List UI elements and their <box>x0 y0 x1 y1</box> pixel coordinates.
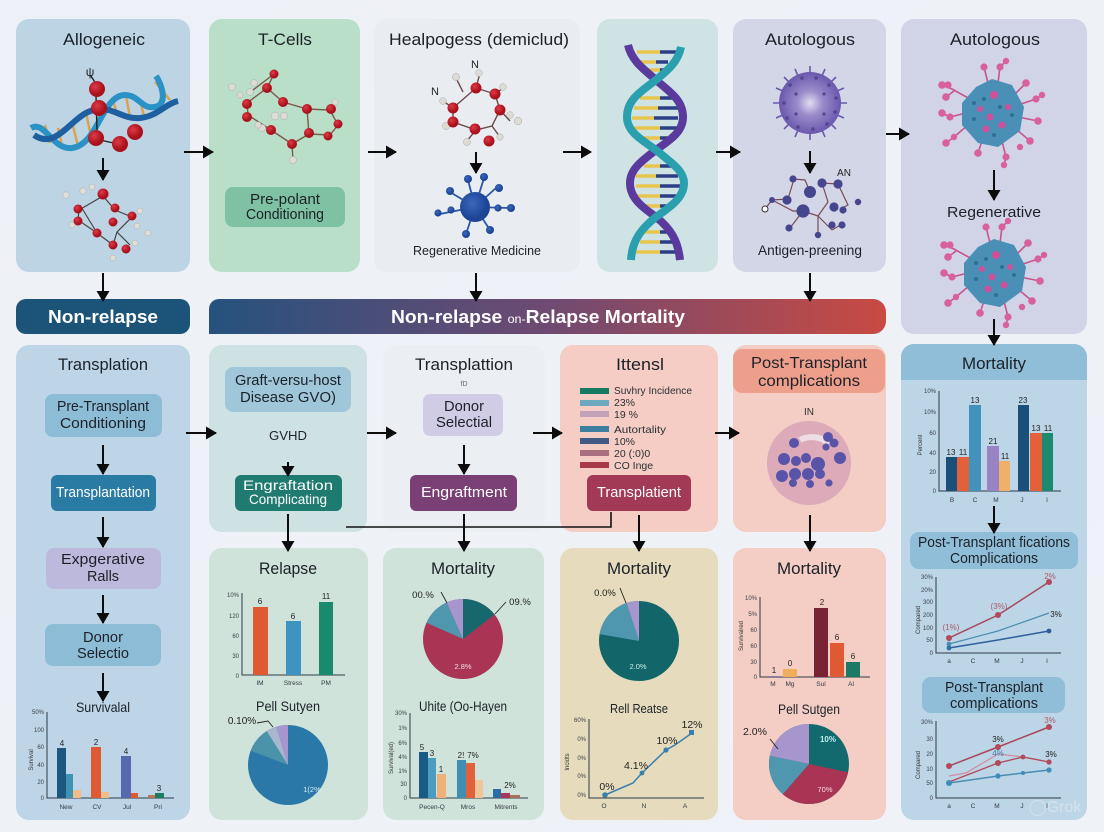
line chart: complications: M <box>994 658 1000 665</box>
bar chart: survival: 4 <box>124 747 129 756</box>
heading: Healpogess (demiclud): Healpogess (demiclud) <box>389 30 569 49</box>
box: Transplantation: Transplantation <box>56 485 150 501</box>
pie chart: Pell Sutgen <box>743 724 849 804</box>
bar chart: mortality: Mg <box>785 681 795 688</box>
bar chart: grouped: 0 <box>404 796 408 802</box>
heading: T-Cells: T-Cells <box>258 30 312 49</box>
bar chart: grouped: 2% <box>504 781 516 790</box>
header: Post-Transplant complications <box>733 349 885 393</box>
pie chart: mortality: 09.% <box>509 597 531 608</box>
arrow: Healpogess to DNA <box>563 151 591 153</box>
bar chart: grouped: 7% <box>467 751 479 760</box>
line chart: complications lower: 3% <box>1044 716 1056 725</box>
heading: Transplanttion: Transplattion <box>415 355 513 374</box>
bar chart: relapse: 30 <box>232 654 240 660</box>
box: Donor Selectio: Donor <box>83 630 123 646</box>
line chart: complications: (1%) <box>943 623 960 632</box>
bar chart: survival: 2 <box>94 738 99 747</box>
line chart: complications lower <box>916 716 1061 810</box>
bar chart: grouped: 30 <box>400 782 408 788</box>
arrow: Healpogess to banner <box>475 273 477 301</box>
bar chart: grouped <box>389 711 528 811</box>
line chart: relapse: 0% <box>577 756 587 762</box>
line chart: complications: a <box>947 658 951 665</box>
bar chart: relapse: 10% <box>227 593 240 599</box>
arrow: Donor to Survival <box>102 673 104 701</box>
pie chart: Pell Sutgen: 70% <box>817 785 833 794</box>
line chart: complications lower: 30 <box>926 737 934 743</box>
bar chart: grouped: 5 <box>420 743 425 752</box>
bar chart: relapse: IM <box>256 680 264 687</box>
banner: Non-relapse or Relapse Mortality: Non-relapse on-Relapse Mortality <box>391 306 686 327</box>
arrow: Autologous to Autologous <box>886 133 909 135</box>
bar chart: mortality: B <box>950 497 954 504</box>
panel: Transplanttion <box>383 345 545 532</box>
bar chart: relapse: 60 <box>232 634 240 640</box>
bar chart: survival: 4 <box>60 739 65 748</box>
bar chart: relapse: 11 <box>322 592 331 601</box>
bar chart: relapse: 120 <box>229 614 240 620</box>
bar chart: mortality: 2 <box>820 598 825 607</box>
arrow: Donor to Engraftment <box>463 445 465 474</box>
bar chart: mortality: 10% <box>924 410 937 416</box>
line chart: relapse <box>565 718 704 810</box>
bar chart: survival: CV <box>92 804 102 811</box>
box: Pre-Transplant Conditioning: Pre-Transplant <box>57 399 149 415</box>
line chart: relapse: 4.1% <box>624 760 648 772</box>
bar chart: grouped: Survival(ed) <box>389 742 395 774</box>
bar chart: survival: Pri <box>154 804 162 811</box>
bar chart: mortality <box>918 389 1061 504</box>
icon: antigen network: AN <box>837 168 851 179</box>
box: Post-Transplant fications Complications: Complications <box>950 551 1038 567</box>
line chart: complications: 2% <box>1044 572 1056 581</box>
panel: T-Cells <box>209 19 360 272</box>
bar chart: relapse: PM <box>321 680 331 687</box>
line chart: complications <box>916 572 1062 665</box>
arrow: Ittensl to complications <box>715 432 739 434</box>
box: Expgerative Ralls <box>46 548 161 589</box>
arrow: complications to Mortality <box>809 515 811 551</box>
icon: spiked virus <box>773 66 847 140</box>
line chart: relapse: N <box>642 803 647 810</box>
heading: Allogeneic: Allogeneic <box>63 30 146 49</box>
legend: 10% <box>614 436 635 448</box>
legend: 19 % <box>614 409 638 421</box>
bar chart: mortality: 6 <box>835 633 840 642</box>
panel: Allogeneic <box>16 19 190 272</box>
icon: ring molecule with N labels: N <box>471 59 479 71</box>
bar chart: relapse: 6 <box>258 597 263 606</box>
line chart: complications lower: 30% <box>921 720 934 726</box>
legend: Autortality <box>614 424 667 436</box>
line chart: complications lower: M <box>994 803 1000 810</box>
bar chart: survival: 40 <box>37 763 45 769</box>
bar chart: mortality: 6 <box>851 652 856 661</box>
line chart: relapse: Incidts <box>565 753 571 771</box>
icon: blue cell <box>434 173 515 238</box>
bar chart: mortality: 0 <box>754 675 758 681</box>
panel: GVHD <box>209 345 367 532</box>
box: Post-Transplant fications Complications <box>910 532 1078 569</box>
pie chart: mortality: 2.8% <box>454 662 472 671</box>
arrow: Transplantation to GVHD <box>186 432 216 434</box>
arrow: Transplantient to Mortality <box>638 515 640 551</box>
arrow: virus to antigen <box>809 151 811 173</box>
line chart: complications lower: Compared <box>916 751 922 779</box>
bar chart: mortality: I <box>1046 497 1048 504</box>
icon: DNA with red atoms <box>31 65 178 152</box>
bar chart: relapse: 0 <box>236 674 240 680</box>
arrow: Autologous to Mortality <box>993 319 995 345</box>
bar chart: grouped: Mitrents <box>494 804 518 811</box>
label: GVHD: GVHD <box>269 429 307 443</box>
bar chart: mortality: 11 <box>1001 452 1010 461</box>
line chart: complications: 300 <box>923 600 934 606</box>
bar chart: mortality: 13 <box>947 448 956 457</box>
icon: ring molecule <box>63 184 151 261</box>
icon: DNA double helix <box>627 45 684 260</box>
arrow: Mortality chart to complications <box>993 506 995 533</box>
line chart: complications lower: 20 <box>926 752 934 758</box>
line chart: complications lower: a <box>947 803 951 810</box>
box: Pre-Transplant Conditioning <box>45 394 162 437</box>
bar chart: mortality: Survivalred <box>739 621 745 651</box>
line chart: relapse: 60% <box>574 718 587 724</box>
box: Engraftment <box>410 475 517 511</box>
label: Regenerative: Regenerative <box>947 204 1041 221</box>
line chart: relapse: 10% <box>656 735 678 747</box>
bar chart: grouped: 1% <box>398 726 408 732</box>
box: Expgerative Ralls: Ralls <box>87 569 119 585</box>
box: Donor Selectio <box>45 624 161 666</box>
bar chart: mortality: 13 <box>1032 424 1041 433</box>
line chart: complications: 0 <box>930 651 934 657</box>
legend: CO Inge <box>614 460 653 472</box>
banner: Non-relapse <box>16 299 190 334</box>
bar chart: grouped: Pecen-Q <box>419 804 445 811</box>
line chart: complications lower: 50 <box>926 781 934 787</box>
bar chart: grouped: 6% <box>398 741 408 747</box>
bar chart: grouped: 4% <box>398 755 408 761</box>
heading: Rell Reatse: Rell Reatse <box>610 701 668 716</box>
heading: Mortality: Mortality <box>777 559 841 578</box>
panel: Autologous (antigen) <box>733 19 886 272</box>
arrow: Transplantation to Expgerative <box>102 517 104 547</box>
line chart: relapse: 0% <box>577 737 587 743</box>
bar chart: survival: 60 <box>37 745 45 751</box>
heading: Transplantation: Transplation <box>58 355 148 374</box>
bar chart: mortality: 0 <box>788 659 793 668</box>
heading: Uhite (Oo-Hayen: Uhite (Oo-Hayen <box>419 698 507 714</box>
pie chart: mortality <box>594 588 679 681</box>
icon: DNA with red atoms: ψ <box>86 65 94 79</box>
connector: GVHD to Transplantient <box>346 512 611 527</box>
label: Regenerative Medicine: Regenerative Medicine <box>413 243 541 258</box>
bar chart: survival: New <box>59 804 73 811</box>
watermark: Grok: ◯Grok <box>1029 799 1082 816</box>
label: fD: fD <box>460 381 468 388</box>
box: Donor Selectial: Selectial <box>436 415 492 431</box>
legend: 23% <box>614 397 635 409</box>
box: Pre-polant Conditioning: Pre-polant <box>250 192 320 208</box>
line chart: relapse: 12% <box>681 719 703 731</box>
bar chart: mortality: 60 <box>750 644 758 650</box>
line chart: complications: 100 <box>923 626 934 632</box>
pie chart: mortality: 0.0% <box>594 588 616 599</box>
heading: Mortality: Mortality <box>607 559 671 578</box>
box: Post-Transplant fications Complications: Post-Transplant fications <box>918 535 1070 551</box>
heading: Autologous: Autologous <box>765 30 855 49</box>
box: Graft-versus-host Disease: Disease GVO) <box>240 390 336 406</box>
panel: Mortality bars and pie <box>733 548 886 820</box>
icon: pink and blue cell <box>938 58 1045 168</box>
box: Transplantation <box>51 475 156 511</box>
icon: antigen network <box>762 168 861 238</box>
bar chart: survival: 50% <box>32 710 45 716</box>
box: Transplantient: Transplatient <box>597 485 681 501</box>
arrow: GVHD to Transplanttion <box>367 432 396 434</box>
box: Graft-versus-host Disease: Graft-versu-host <box>235 373 341 389</box>
line chart: complications: 3% <box>1050 610 1062 619</box>
arrow: Autologous to banner <box>809 273 811 301</box>
bar chart: grouped: 30% <box>395 711 408 717</box>
pie chart: Pell Sutyen: 1(2% <box>303 785 321 794</box>
pie chart: Pell Sutyen: 0.10% <box>228 716 256 727</box>
bar chart: survival: 20 <box>37 780 45 786</box>
bar chart: mortality <box>739 596 870 688</box>
arrow: Engraftation to Relapse <box>287 514 289 551</box>
header: Mortality: Mortality <box>962 354 1026 373</box>
legend: Suvhry Incidence <box>614 385 692 397</box>
box: Donor Selectial <box>423 394 503 436</box>
line chart: relapse: 0% <box>577 774 587 780</box>
box: Expgerative Ralls: Expgerative <box>61 552 145 568</box>
heading: Autologous: Autologous <box>950 30 1040 49</box>
panel: DNA helix <box>597 19 718 272</box>
bar chart: mortality: 11 <box>959 448 968 457</box>
bar chart: mortality: 40 <box>929 451 937 457</box>
bar chart: survival: 0 <box>41 796 45 802</box>
bar chart: relapse: Stress <box>284 680 303 687</box>
bar chart: survival: Jul <box>123 804 132 811</box>
bar chart: grouped: 1% <box>398 769 408 775</box>
icon: ring molecule with N labels: N <box>431 86 439 98</box>
pie chart: Pell Sutgen: 10% <box>820 735 836 744</box>
line chart: complications lower: 3% <box>1045 750 1057 759</box>
legend: 20 (:0)0 <box>614 448 650 460</box>
heading: Relapse: Relapse <box>259 559 317 578</box>
box: Donor Selectial: Donor <box>444 399 484 415</box>
bar chart: survival: 3 <box>157 784 162 793</box>
bar chart: mortality: 11 <box>1044 424 1053 433</box>
bar chart: mortality: 0 <box>933 489 937 495</box>
panel: Autologous (regenerative) <box>901 19 1087 334</box>
bar chart: mortality: 10% <box>745 596 758 602</box>
bar chart: mortality: 21 <box>989 437 998 446</box>
pie chart: mortality: 00.% <box>412 590 434 601</box>
arrow: Allogeneic to banner <box>102 273 104 301</box>
bar chart: mortality: 23 <box>1019 396 1028 405</box>
bar chart: grouped: Mros <box>461 804 476 811</box>
heading: Pell Sutyen: Pell Sutyen <box>256 698 320 714</box>
line chart: relapse: 0% <box>599 781 615 793</box>
panel: Mortality pie and bars <box>383 548 544 820</box>
icon: cell with purple clusters <box>767 421 851 505</box>
arrow: Allogeneic to T-Cells <box>184 151 213 153</box>
line chart: relapse: A <box>683 803 688 810</box>
box: Donor Selectio: Selectio <box>77 646 129 662</box>
line chart: relapse: 0% <box>577 793 587 799</box>
line chart: complications: C <box>971 658 976 665</box>
bar chart: relapse <box>227 592 345 687</box>
line chart: complications: 50 <box>926 638 934 644</box>
bar chart: mortality: 10% <box>924 389 937 395</box>
bar chart: mortality: 20 <box>929 470 937 476</box>
label: Antigen-preening: Antigen-preening <box>758 243 862 258</box>
bar chart: mortality: 60 <box>750 628 758 634</box>
icon: ring molecule with N labels <box>431 59 522 146</box>
label: IN: IN <box>804 407 814 418</box>
arrow: Pre-Transplant to Transplantation <box>102 445 104 474</box>
header: Post-Transplant complications: Post-Transplant <box>751 355 868 372</box>
pie chart: mortality <box>412 590 531 679</box>
bar chart: mortality: C <box>973 497 978 504</box>
box: Engraftation Complicating <box>235 475 342 511</box>
panel: Transplantation flow <box>16 345 190 820</box>
icon: molecule <box>228 70 342 164</box>
line chart: complications: 20% <box>921 588 934 594</box>
arrow: DNA to molecule <box>102 158 104 180</box>
bar chart: relapse: 6 <box>291 612 296 621</box>
bar chart: grouped: 2! <box>458 751 464 760</box>
bar chart: grouped: 3 <box>430 749 435 758</box>
arrow: Engraftment to Mortality <box>463 514 465 551</box>
arrow: cell to regenerative <box>993 170 995 200</box>
header: Post-Transplant complications: complications <box>758 373 860 390</box>
box: Pre-polant Conditioning: Conditioning <box>246 207 324 223</box>
bar chart: survival: 100 <box>34 728 45 734</box>
line chart: complications: Compared <box>916 606 922 634</box>
heading: Survivalal: Survivalal <box>76 699 130 715</box>
line chart: complications: I <box>1046 658 1048 665</box>
bar chart: survival: Survival <box>29 749 35 771</box>
box: Engraftation Complicating: Engraftation <box>243 477 333 493</box>
panel: Mortality pie and line <box>560 548 718 820</box>
bar chart: mortality: 5% <box>748 612 758 618</box>
line chart: complications: 200 <box>923 613 934 619</box>
banner: Non-relapse: Non-relapse <box>48 306 158 327</box>
arrow: DNA to Autologous <box>716 151 740 153</box>
line chart: complications lower: 3% <box>992 735 1004 744</box>
panel: Relapse <box>209 548 368 820</box>
box: Transplantient <box>587 475 691 511</box>
arrow: Transplanttion to Ittensl <box>533 432 562 434</box>
heading: Mortality: Mortality <box>431 559 495 578</box>
line chart: complications lower: 4% <box>992 749 1004 758</box>
panel: Mortality right column <box>901 344 1087 820</box>
line chart: complications lower: J <box>1020 803 1024 810</box>
pie chart: mortality: 2.0% <box>629 662 647 671</box>
banner: Non-relapse or Relapse Mortality <box>209 299 886 334</box>
heading: Pell Sutgen: Pell Sutgen <box>778 701 840 717</box>
bar chart: mortality: M <box>770 681 776 688</box>
pie chart: Pell Sutgen: 2.0% <box>743 726 767 738</box>
heading: Ittensl: Ittensl <box>616 355 664 374</box>
arrow: T-Cells to Healpogess <box>368 151 396 153</box>
panel: Healpogess <box>374 19 580 272</box>
box: Pre-polant Conditioning <box>225 187 345 227</box>
bar chart: mortality: Percent <box>918 434 924 455</box>
box: Post-Transplant complications <box>922 677 1065 713</box>
box: Post-Transplant complications: complications <box>950 696 1038 712</box>
panel: Post-Transplant complications <box>733 345 886 532</box>
arrow: molecule to cell <box>475 152 477 173</box>
bar chart: mortality: M <box>993 497 999 504</box>
line chart: complications: J <box>1020 658 1024 665</box>
bar chart: mortality: 13 <box>971 396 980 405</box>
line chart: relapse: O <box>601 803 607 810</box>
line chart: complications lower: I <box>1046 803 1048 810</box>
legend <box>580 385 692 472</box>
box: Engraftment: Engraftment <box>421 485 507 501</box>
icon: pink and blue cell lower <box>940 218 1047 328</box>
bar chart: grouped: 1 <box>439 765 444 774</box>
box: Graft-versus-host Disease <box>225 367 351 412</box>
pie chart: Pell Sutyen <box>228 716 328 805</box>
box: Post-Transplant complications: Post-Transplant <box>945 680 1043 696</box>
bar chart: survival <box>29 710 174 811</box>
bar chart: mortality: 30 <box>750 660 758 666</box>
line chart: complications: 30% <box>921 575 934 581</box>
bar chart: mortality: J <box>1020 497 1024 504</box>
panel: Ittensl legend <box>560 345 718 532</box>
line chart: complications lower: 0 <box>930 796 934 802</box>
bar chart: mortality: 1 <box>772 666 777 675</box>
bar chart: mortality: 60 <box>929 431 937 437</box>
bar chart: mortality: Al <box>848 681 854 688</box>
box: Engraftation Complicating: Complicating <box>249 491 327 507</box>
bar chart: mortality: Sul <box>816 681 826 688</box>
line chart: complications: (3%) <box>991 602 1008 611</box>
arrow: GVHD to Engraftation <box>287 462 289 476</box>
line chart: complications lower: C <box>971 803 976 810</box>
line chart: complications lower: 10 <box>926 767 934 773</box>
arrow: Expgerative to Donor <box>102 595 104 623</box>
box: Pre-Transplant Conditioning: Conditioning <box>60 416 146 432</box>
header: Mortality <box>901 344 1087 380</box>
